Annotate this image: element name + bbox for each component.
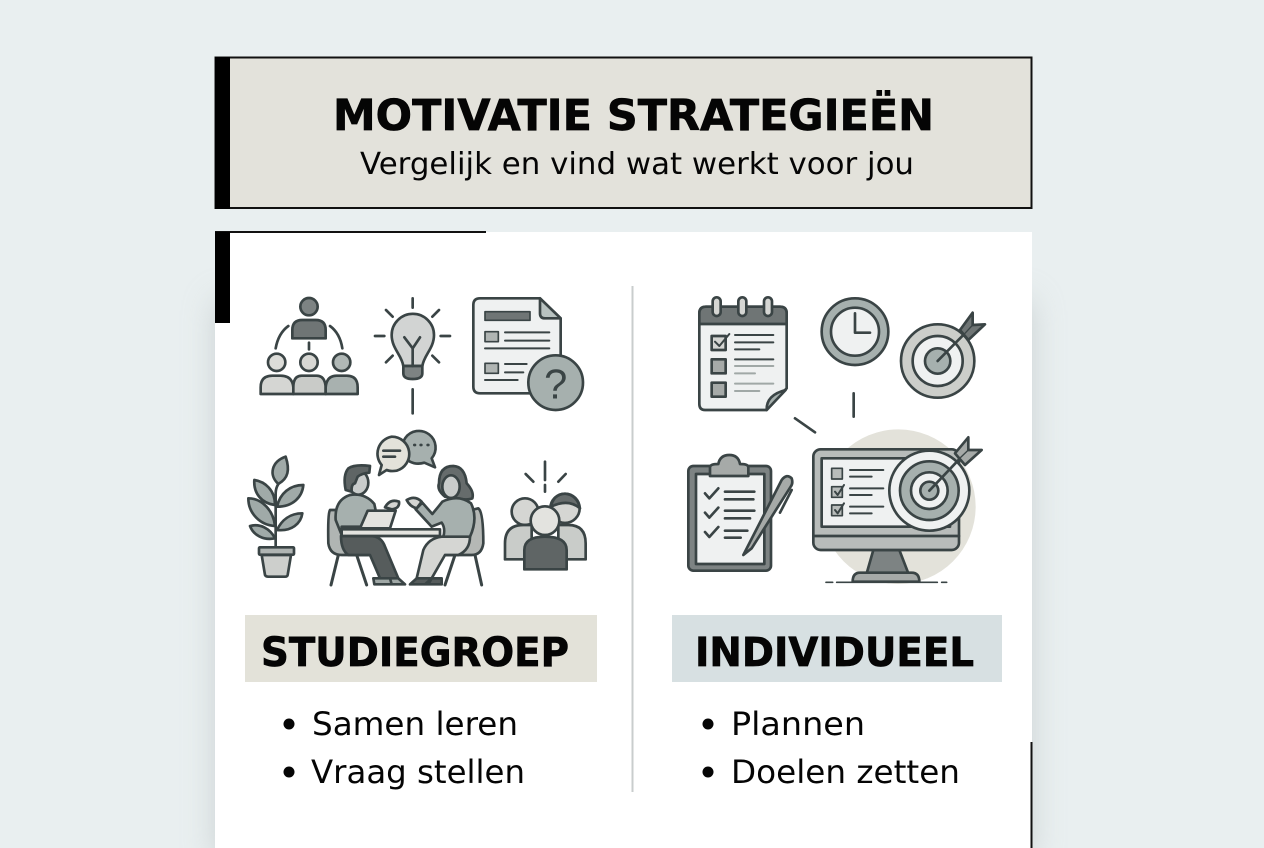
icon: light bulb [375, 298, 450, 413]
subtitle: Vergelijk en vind wat werkt voor jou [360, 147, 914, 182]
bullet list: studiegroep: Samen leren [312, 705, 518, 743]
icon: document with question mark: ? [544, 361, 567, 408]
icon: two people talking at a table [328, 431, 483, 585]
bullet list: studiegroep: Vraag stellen [311, 753, 525, 791]
title: MOTIVATIE STRATEGIEËN [333, 90, 934, 141]
bullet list: studiegroep [284, 705, 525, 791]
main comparison card [215, 231, 1032, 848]
speech bubbles [377, 431, 436, 475]
icon: calendar checklist [699, 297, 787, 410]
label: individueel [672, 615, 1002, 682]
right column: individueel illustrations [688, 297, 985, 584]
label: studiegroep [245, 615, 597, 682]
icon: potted plant [248, 457, 303, 577]
bullet list: individueel: Doelen zetten [731, 753, 960, 791]
left column: studiegroep illustrations [248, 298, 586, 585]
icon: monitor with checklist and target [813, 429, 982, 584]
icon: clock [822, 298, 888, 365]
header panel [215, 57, 1032, 209]
icon: crowd of people [505, 462, 586, 569]
connector lines [795, 393, 854, 432]
icon: clipboard with pen [688, 455, 792, 571]
icon: target with arrow [901, 313, 985, 398]
icon: document with question mark [473, 298, 583, 410]
label: studiegroep: STUDIEGROEP [261, 630, 569, 676]
bullet list: individueel [702, 705, 960, 791]
label: individueel: INDIVIDUEEL [695, 630, 974, 676]
icon: group hierarchy [261, 298, 358, 394]
bullet list: individueel: Plannen [731, 705, 865, 743]
